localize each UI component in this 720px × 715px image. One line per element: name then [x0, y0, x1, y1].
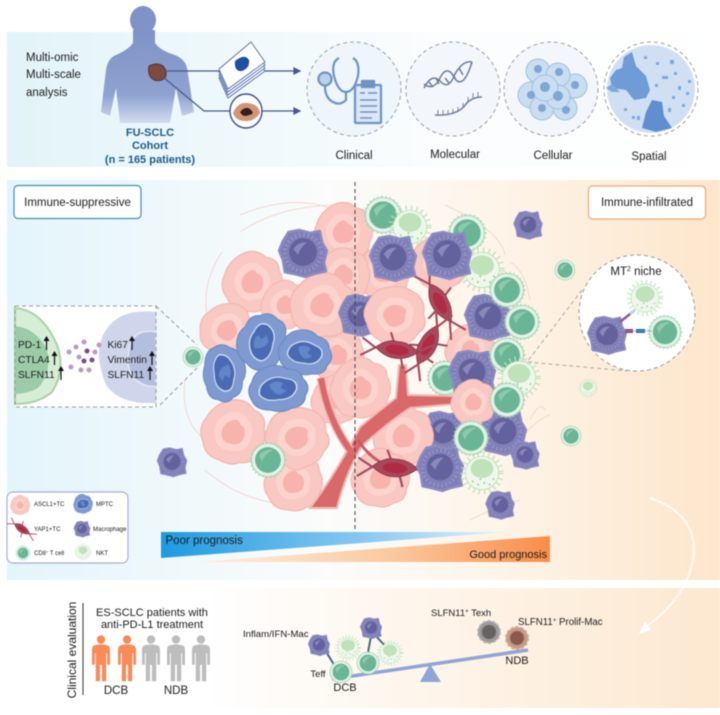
- callout: T cell and MPTC interaction: Vimentin: [108, 355, 147, 366]
- legend: [5, 492, 128, 563]
- callout: T cell and MPTC interaction: CTLA4: [18, 355, 50, 366]
- central divider: [354, 182, 356, 532]
- panel: clinical: Clinical: [335, 150, 373, 162]
- macrophages: [158, 212, 542, 519]
- legend: YAP1+TC: [34, 527, 61, 533]
- callout: MT2 niche: MT: [610, 266, 627, 278]
- seesaw right: NDB cells: Texh: [469, 608, 491, 619]
- heading: treatment cohort: ES-SCLC patients with: [96, 607, 208, 619]
- legend: Macrophage: [93, 527, 127, 533]
- cohort label: FU-SCLC: [126, 127, 174, 139]
- seesaw: [332, 650, 528, 682]
- panel: molecular: [406, 42, 500, 161]
- cohort label: [105, 127, 195, 166]
- patient group labels: [104, 685, 188, 697]
- legend: MPTC: [96, 502, 114, 508]
- seesaw right: NDB cells: SLFN11: [431, 608, 465, 619]
- seesaw right: NDB cells: Prolif-Mac: [556, 617, 603, 628]
- callout: T cell and MPTC interaction: SLFN11: [108, 370, 144, 381]
- divider line: [82, 603, 84, 695]
- legend: ASCL1+TC: [34, 502, 65, 508]
- tumour vasculature: [310, 365, 455, 508]
- callout: MT2 niche: [527, 255, 695, 371]
- rotated label: clinical evaluation: Clinical evaluation: [65, 602, 79, 698]
- panel: cellular: Cellular: [534, 150, 573, 162]
- legend: T cell: [48, 551, 64, 557]
- cohort label: Cohort: [132, 140, 168, 152]
- heading: multi-omic multi-scale analysis: [26, 52, 81, 99]
- seesaw right: NDB cells: NDB: [505, 655, 529, 667]
- patient group labels: NDB: [164, 685, 188, 697]
- legend: CD8: [34, 551, 46, 557]
- T cells behind: [250, 196, 486, 478]
- callout: T cell and MPTC interaction: [15, 306, 197, 407]
- T cells and NKT front: [183, 260, 581, 492]
- icon: patients: [92, 635, 210, 681]
- panel: molecular: Molecular: [430, 149, 480, 161]
- legend: NKT: [96, 551, 108, 557]
- panel: clinical: [307, 42, 401, 162]
- seesaw left: DCB cells: Teff: [310, 669, 326, 680]
- ASCL1+ tumour cells: [190, 202, 495, 511]
- seesaw right: NDB cells: +: [465, 609, 469, 615]
- heading: multi-omic multi-scale analysis: analysis: [26, 87, 68, 99]
- MPTC cells: [203, 306, 337, 412]
- callout: MT2 niche: 2: [627, 266, 631, 273]
- YAP1+ tumour cells: [356, 264, 473, 489]
- tumour cell over macrophage: [451, 379, 496, 424]
- panel: spatial: [604, 42, 698, 163]
- label: immune-infiltrated: [588, 186, 706, 219]
- fibres: [184, 202, 550, 520]
- callout: T cell and MPTC interaction: Ki67: [108, 340, 128, 351]
- label: immune-infiltrated: Immune-infiltrated: [601, 197, 693, 209]
- prognosis gradient: poor: Poor prognosis: [166, 535, 243, 547]
- prognosis gradient: good: [197, 536, 550, 562]
- label: immune-suppressive: Immune-suppressive: [24, 197, 131, 209]
- legend: +: [46, 549, 49, 554]
- panel: clinical evaluation background: [208, 588, 720, 708]
- seesaw left: DCB cells: DCB: [333, 682, 357, 694]
- cohort label: (n = 165 patients): [105, 154, 195, 166]
- seesaw right: NDB cells: [431, 608, 603, 667]
- heading: multi-omic multi-scale analysis: Multi-scale: [26, 69, 81, 81]
- seesaw right: NDB cells: +: [553, 618, 557, 624]
- patient group labels: DCB: [104, 685, 128, 697]
- arrow: to clinical evaluation: [639, 498, 694, 634]
- panel: spatial: Spatial: [631, 151, 667, 163]
- callout: T cell and MPTC interaction: SLFN11: [18, 370, 55, 381]
- seesaw right: NDB cells: SLFN11: [518, 617, 553, 628]
- heading: multi-omic multi-scale analysis: Multi-omic: [26, 52, 79, 64]
- panel: cellular: [504, 42, 598, 162]
- icon: tumour section: [230, 94, 262, 128]
- NKT cells: [391, 208, 596, 396]
- prognosis gradient: poor: [161, 532, 508, 558]
- label: immune-suppressive: [14, 186, 141, 218]
- icon: slide stack: [219, 42, 265, 98]
- macrophage behind MPTC: [279, 230, 327, 277]
- prognosis gradient: good: Good prognosis: [469, 549, 547, 561]
- heading: treatment cohort: anti-PD-L1 treatment: [101, 619, 203, 631]
- panel: tumour microenvironment background: [7, 180, 720, 580]
- arrow: tumour to tissue blocks to data: [163, 68, 300, 114]
- heading: treatment cohort: [96, 607, 208, 631]
- seesaw left: DCB cells: Inflam/IFN-Mac: [243, 629, 309, 640]
- callout: T cell and MPTC interaction: PD-1: [18, 340, 42, 351]
- top panel background: [7, 32, 720, 167]
- seesaw left: DCB cells: [243, 618, 402, 694]
- callout: MT2 niche: niche: [631, 266, 662, 278]
- icon: human body with lung tumour: [101, 6, 194, 123]
